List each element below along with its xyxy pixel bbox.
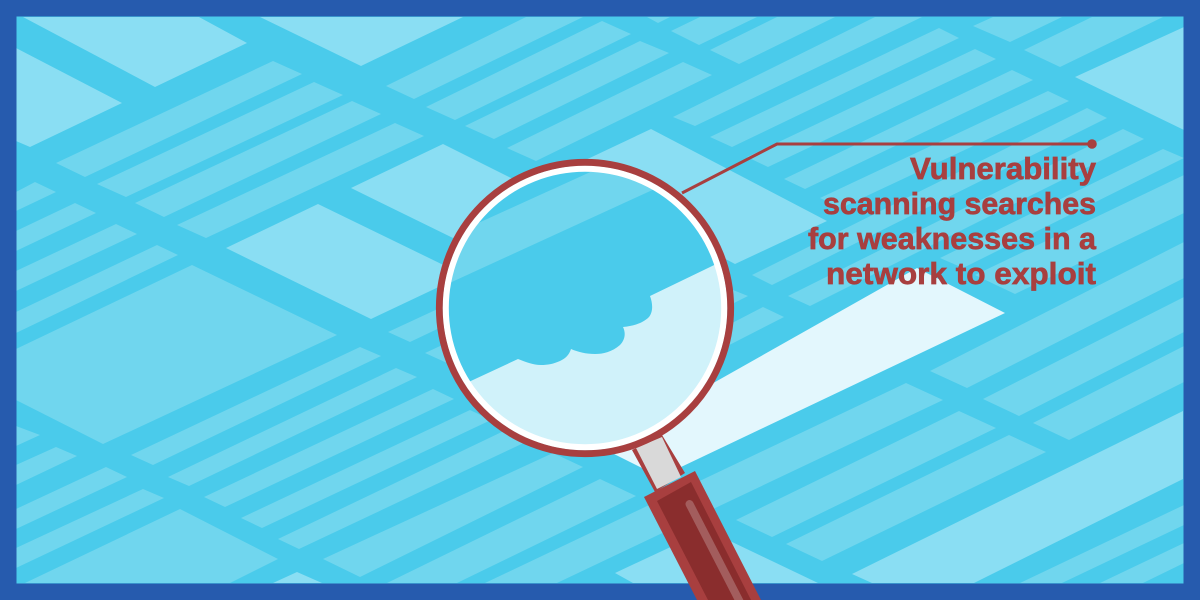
lens red rim <box>439 162 731 454</box>
lens view <box>448 172 722 444</box>
callout leader line <box>682 139 1097 193</box>
scanned path highlight <box>600 268 1005 477</box>
magnifier handle <box>644 471 761 600</box>
callout text: scanning searches <box>823 186 1096 221</box>
callout text: network to exploit <box>826 256 1096 291</box>
callout text: Vulnerability <box>910 151 1097 186</box>
callout text: for weaknesses in a <box>808 221 1097 256</box>
magnifying glass <box>436 158 761 600</box>
lens white ring <box>446 169 724 447</box>
magnifier neck <box>632 435 685 492</box>
